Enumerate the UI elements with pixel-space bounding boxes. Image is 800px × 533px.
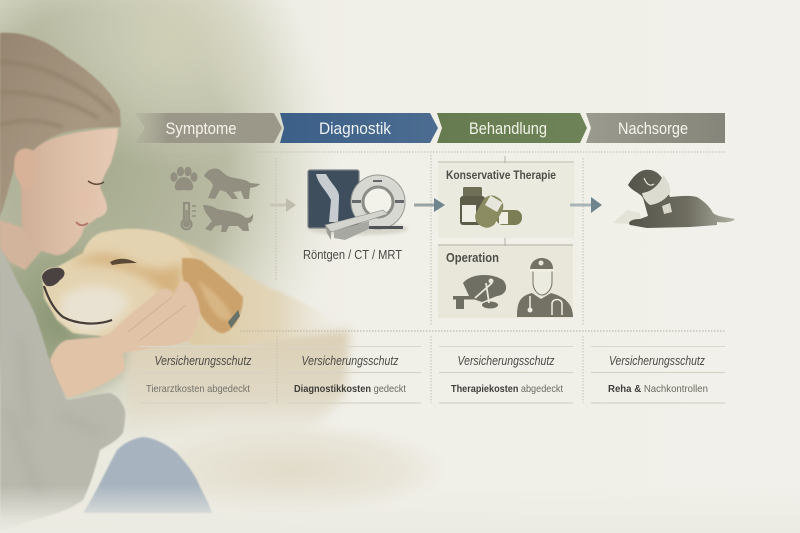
icon: dog standing: [204, 168, 260, 199]
label: imaging: Röntgen / CT / MRT: [303, 248, 402, 262]
step headers: [135, 113, 725, 143]
header: Diagnostik: [280, 113, 438, 143]
dog ear: [182, 258, 243, 333]
icon: medication: [460, 187, 522, 231]
icon: thermometer: [182, 203, 196, 229]
CT ring: [351, 175, 405, 229]
insurance row: Symptome: Tierarztkosten abgedeckt: [146, 383, 250, 395]
symptom icons: [170, 167, 260, 232]
panel: operation: [438, 238, 573, 318]
icon: x-ray and CT scanner: [308, 170, 408, 240]
chest gauze: [662, 203, 672, 214]
hair: [0, 33, 121, 217]
insurance row: Diagnostik: [287, 346, 421, 403]
rocky ground: [130, 420, 450, 520]
header: Nachsorge: [586, 113, 725, 143]
photo: woman: [0, 33, 212, 533]
smile: [76, 222, 88, 225]
mouth line: [44, 286, 112, 324]
panel: conservative therapy: [438, 156, 574, 238]
scanner table: [325, 210, 388, 240]
finger lines: [128, 297, 186, 340]
x-ray panel: [308, 170, 359, 228]
icon: recovering dog with cone: [613, 170, 735, 228]
header: Behandlung: Behandlung: [469, 119, 547, 138]
header: Behandlung: [437, 113, 587, 143]
insurance row: Symptome: Versicherungsschutz: [154, 354, 252, 368]
ear: [14, 148, 37, 190]
forearm and hands: [50, 282, 200, 398]
snout tan shading: [70, 254, 182, 296]
hair strands: [0, 62, 112, 127]
insurance row: Nachsorge: Reha & Nachkontrollen: [608, 383, 708, 395]
bandage: [613, 210, 642, 225]
insurance row: Diagnostik: Diagnostikkosten gedeckt: [294, 383, 406, 395]
heading: conservative therapy: Konservative Therapie: [446, 168, 556, 182]
misty green backdrop: [0, 0, 345, 465]
eye: [110, 259, 137, 265]
dog collar: [228, 310, 240, 328]
dog lower body: [127, 330, 350, 445]
icon: dog lying: [203, 205, 253, 232]
header: Nachsorge: Nachsorge: [618, 119, 688, 138]
header: Symptome: [135, 113, 282, 143]
header: Diagnostik: Diagnostik: [319, 119, 391, 138]
insurance row: Behandlung: Therapiekosten abgedeckt: [451, 383, 563, 395]
insurance row: Symptome: [139, 346, 268, 403]
dog ear highlight: [644, 178, 654, 185]
icon: paw: [170, 167, 198, 190]
bottom mist: [0, 485, 800, 533]
dog head: [42, 229, 205, 340]
insurance row: Diagnostik: Versicherungsschutz: [302, 354, 399, 368]
insurance row: Behandlung: [439, 346, 573, 403]
header: Symptome: Symptome: [166, 119, 236, 138]
white muzzle: [60, 286, 130, 332]
dog back: [173, 237, 345, 345]
jeans: [83, 437, 212, 513]
face: [20, 128, 118, 255]
closed eye: [88, 181, 104, 184]
arrow: symptoms to diagnostics: [270, 198, 296, 212]
sweater folds: [8, 335, 100, 495]
cone: [642, 175, 670, 205]
arrow: diagnostics to treatment: [414, 198, 445, 212]
insurance row: Nachsorge: [591, 346, 725, 403]
insurance row: Behandlung: Versicherungsschutz: [458, 354, 555, 368]
nose: [42, 268, 64, 286]
dog silhouette: [628, 170, 735, 228]
sweater: [0, 247, 125, 533]
arrow: treatment to aftercare: [570, 197, 602, 213]
heading: operation: Operation: [446, 251, 499, 265]
icon: surgery table and tools: [453, 275, 506, 309]
photo: dog: [42, 229, 350, 445]
icon: veterinarian: [517, 258, 573, 317]
neck: [0, 220, 42, 270]
blush and cheek: [70, 191, 94, 209]
insurance row: Nachsorge: Versicherungsschutz: [609, 354, 706, 368]
